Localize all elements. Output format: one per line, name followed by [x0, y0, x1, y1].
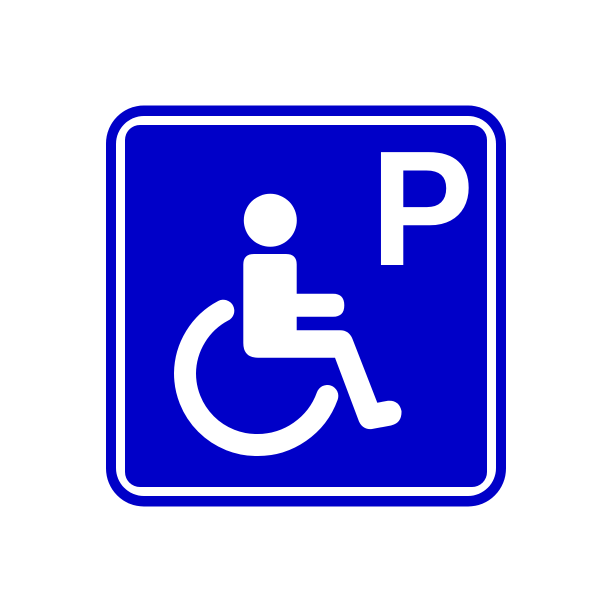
icon: wheelchair user: [185, 194, 402, 445]
head: [244, 194, 297, 247]
torso, arm and leg: [243, 254, 402, 429]
wheel: [185, 311, 327, 445]
white ring: [116, 116, 496, 496]
inner blue panel: [125, 125, 487, 487]
letter P: P: [371, 117, 474, 300]
sign: accessible parking: [106, 106, 506, 506]
sign outer blue border: [106, 106, 506, 506]
